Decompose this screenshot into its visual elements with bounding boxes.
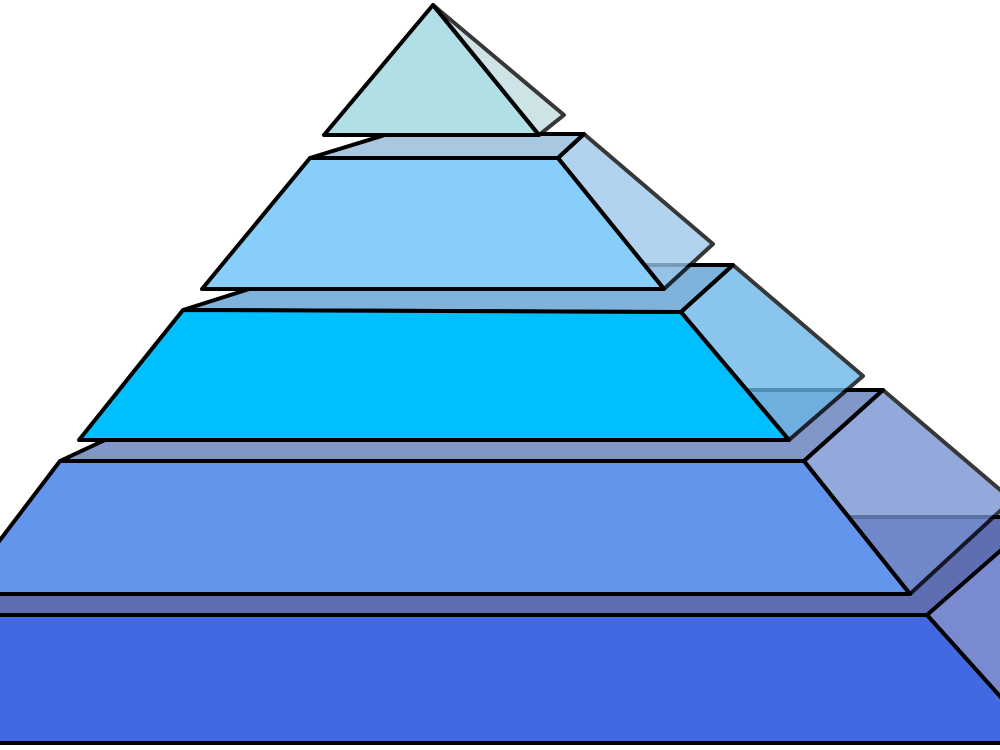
- tier 3 top face: [183, 265, 733, 312]
- tier 4: [0, 390, 1000, 594]
- tier 2 side face: [558, 134, 713, 289]
- tier 3 front face: [79, 310, 789, 440]
- tier 4 side face: [804, 390, 1000, 594]
- tier 1: apex: [324, 5, 564, 135]
- tier 5 top face: [0, 517, 1000, 615]
- tier 2 front and top edges: [558, 134, 664, 289]
- tier 3 front and top edges: [681, 265, 789, 440]
- apex front face: [324, 5, 539, 135]
- tier 4 top face: [60, 390, 883, 461]
- apex side face: [433, 5, 564, 135]
- tier 3: [79, 265, 863, 440]
- tier 2 front face: [202, 158, 664, 289]
- tier 5: base of pyramid: [0, 517, 1000, 743]
- tier 2: [202, 134, 713, 289]
- tier 2 top face: [310, 134, 584, 158]
- tier 4 front and top edges: [804, 390, 910, 594]
- tier 4 front face: [0, 461, 910, 594]
- tier 5 front face: [0, 615, 1000, 743]
- tier 3 side face: [681, 265, 863, 440]
- apex front edge: [433, 5, 539, 135]
- tier 5 side face: [927, 517, 1000, 743]
